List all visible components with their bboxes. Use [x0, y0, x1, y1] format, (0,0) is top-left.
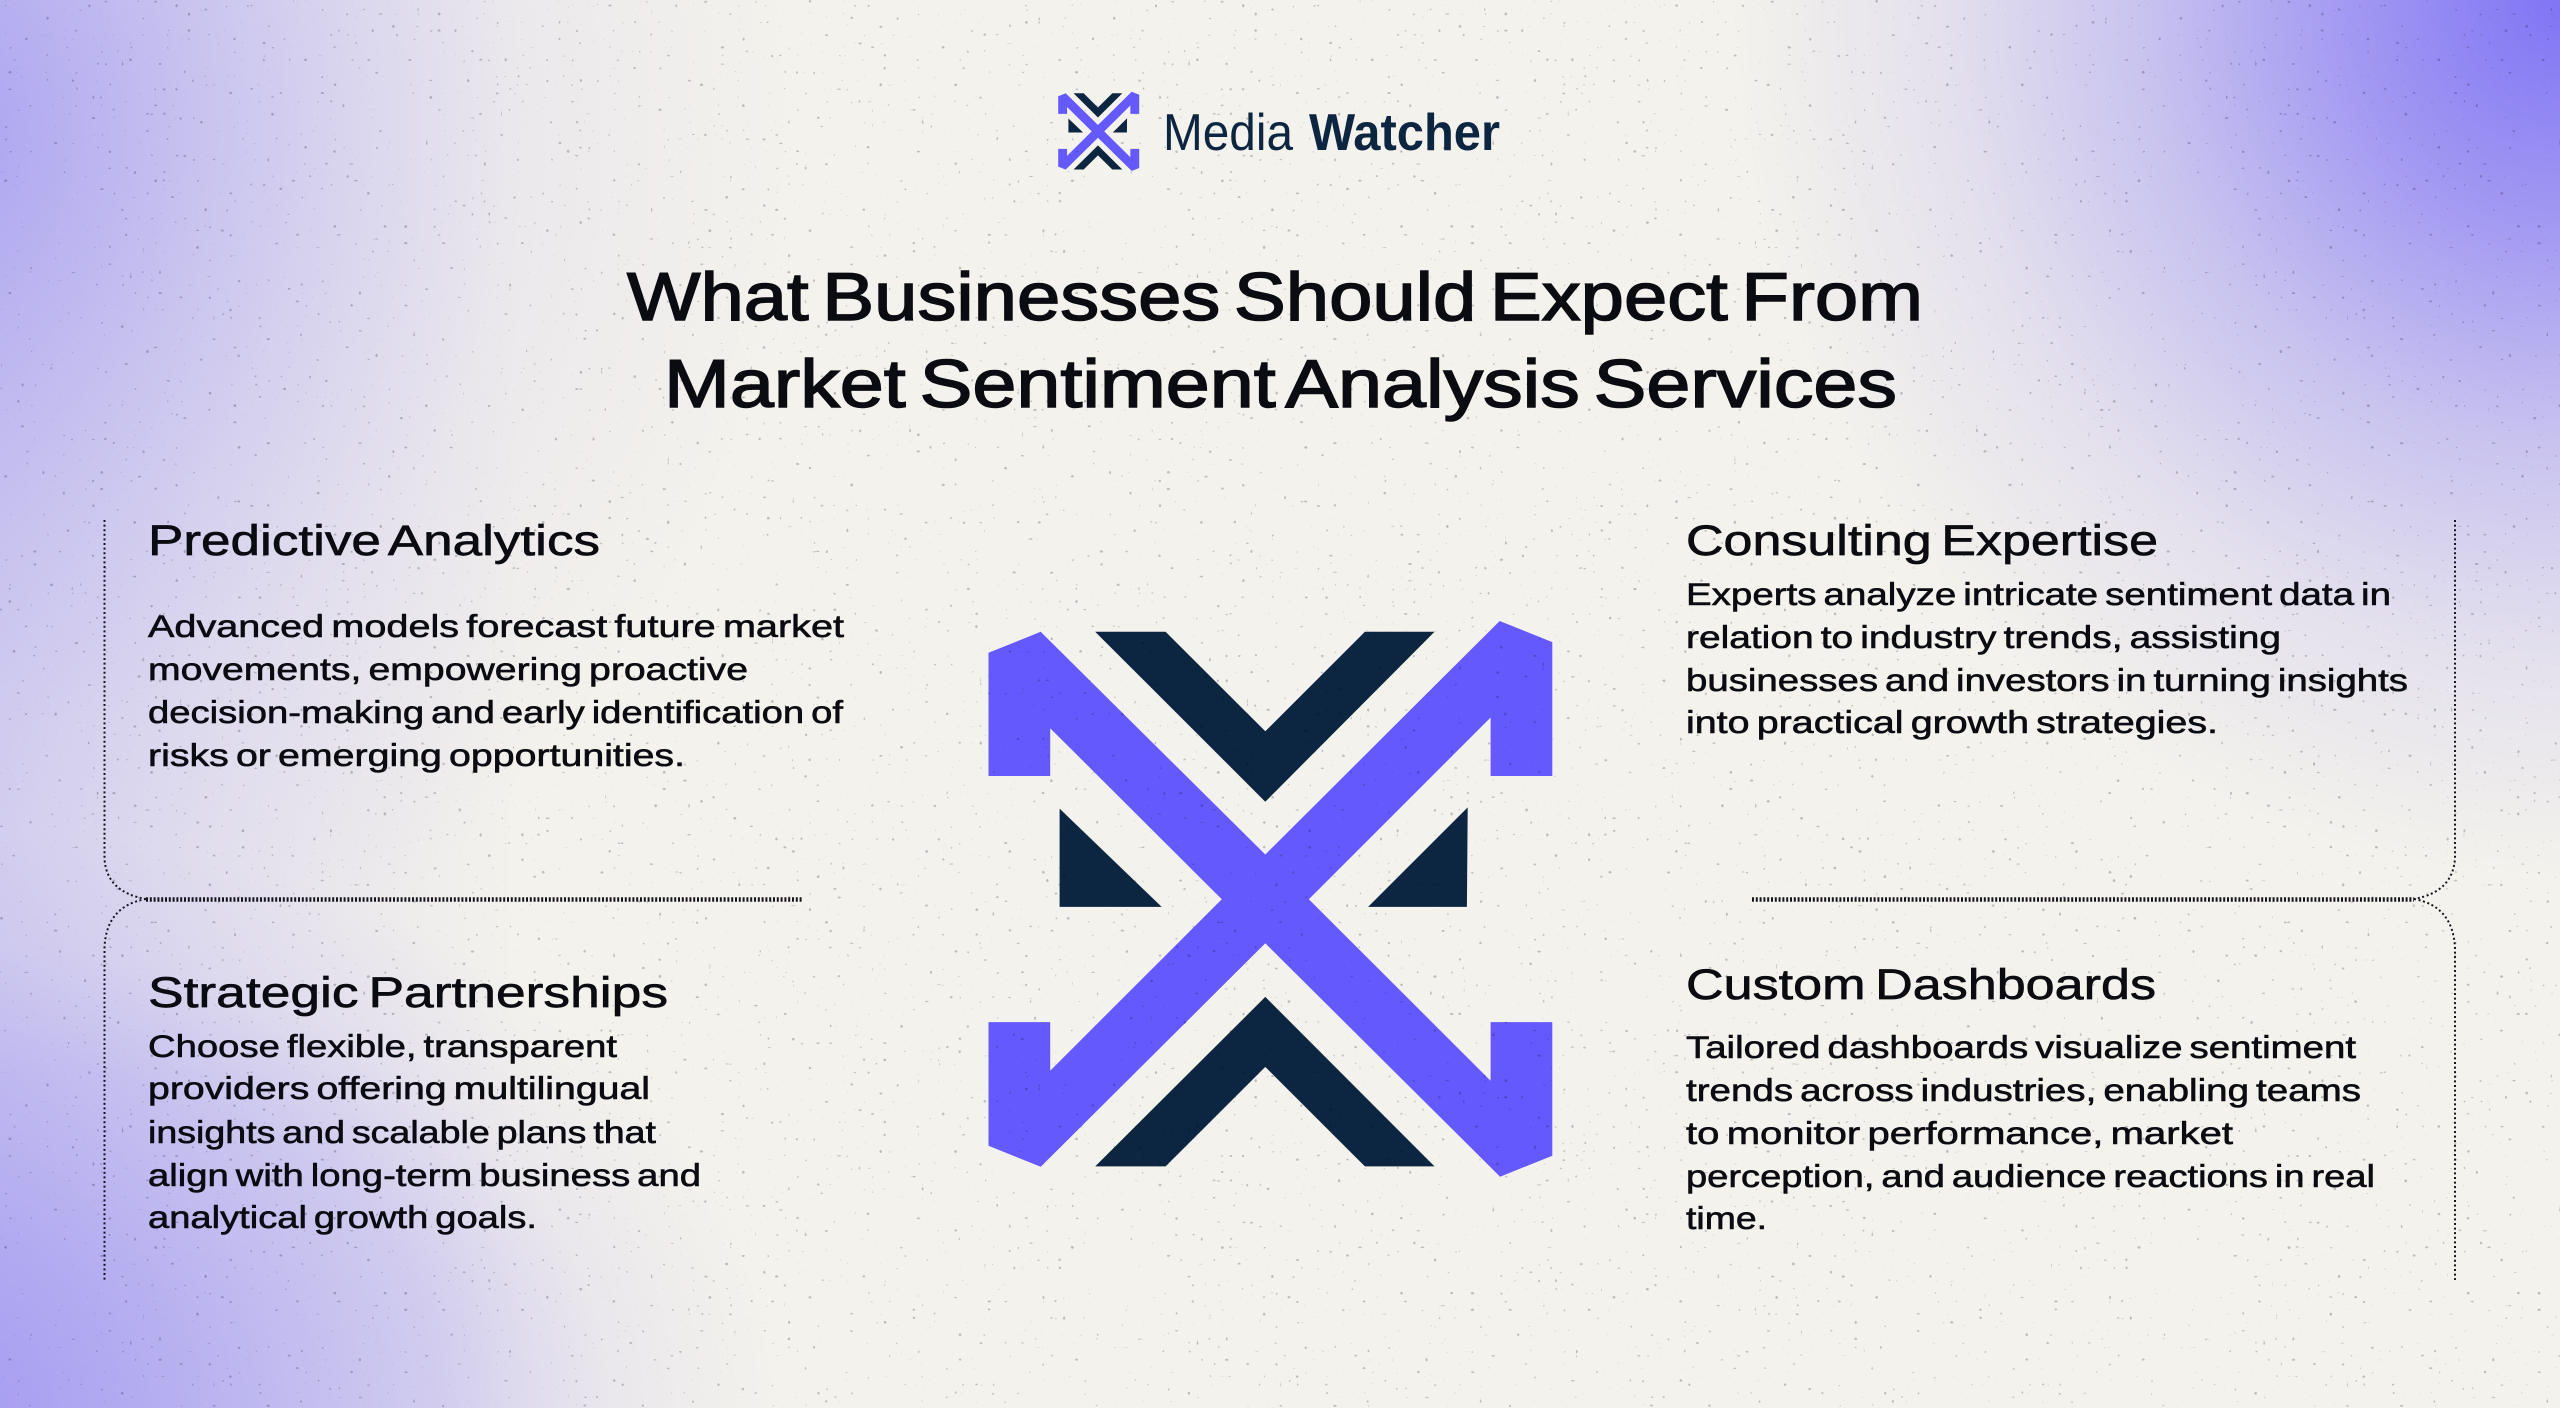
- body text: time.: [1686, 1200, 1767, 1236]
- body text: [148, 1028, 701, 1235]
- purple arrows: [988, 621, 1552, 1177]
- panel: predictive analytics: [148, 517, 844, 773]
- logo wordmark: [1163, 104, 1500, 162]
- body text: relation to industry trends, assisting: [1686, 619, 2281, 655]
- body text: align with long-term business and: [148, 1157, 701, 1193]
- navy top chevron: [1095, 632, 1434, 802]
- body text: risks or emerging opportunities.: [148, 737, 685, 773]
- navy left triangle: [1060, 809, 1162, 907]
- body text: [1686, 576, 2408, 740]
- logo wordmark: Media: [1163, 104, 1293, 162]
- title: What Businesses Should Expect From: [627, 259, 1923, 335]
- navy bottom chevron: [1095, 997, 1434, 1166]
- heading: Consulting Expertise: [1686, 517, 2158, 565]
- body text: [148, 608, 844, 773]
- central X mark: [988, 621, 1552, 1177]
- body text: trends across industries, enabling teams: [1686, 1072, 2361, 1108]
- navy right triangle: [1368, 807, 1468, 907]
- title: Market Sentiment Analysis Services: [664, 346, 1897, 422]
- title: [627, 259, 1923, 422]
- body text: Experts analyze intricate sentiment data in: [1686, 576, 2391, 612]
- logo: [1058, 92, 1500, 171]
- logo wordmark: Watcher: [1309, 104, 1500, 162]
- body text: perception, and audience reactions in real: [1686, 1158, 2375, 1194]
- heading: Predictive Analytics: [148, 517, 600, 565]
- panel: consulting expertise: [1686, 517, 2408, 740]
- heading: Custom Dashboards: [1686, 961, 2156, 1009]
- body text: to monitor performance, market: [1686, 1115, 2233, 1151]
- panel: strategic partnerships: [148, 969, 701, 1235]
- body text: analytical growth goals.: [148, 1199, 537, 1235]
- body text: into practical growth strategies.: [1686, 704, 2218, 740]
- body text: Choose flexible, transparent: [148, 1028, 617, 1064]
- body text: [1686, 1029, 2375, 1236]
- left dotted bracket: [104, 520, 803, 1280]
- body text: decision-making and early identification of: [148, 694, 843, 730]
- panel: custom dashboards: [1686, 961, 2375, 1236]
- body text: Tailored dashboards visualize sentiment: [1686, 1029, 2356, 1065]
- body text: providers offering multilingual: [148, 1070, 650, 1106]
- body text: businesses and investors in turning insights: [1686, 662, 2408, 698]
- body text: insights and scalable plans that: [148, 1114, 656, 1150]
- right dotted bracket: [1752, 520, 2455, 1280]
- body text: movements, empowering proactive: [148, 651, 748, 687]
- heading: Strategic Partnerships: [148, 969, 668, 1017]
- logo mark: [1058, 92, 1139, 171]
- body text: Advanced models forecast future market: [148, 608, 844, 644]
